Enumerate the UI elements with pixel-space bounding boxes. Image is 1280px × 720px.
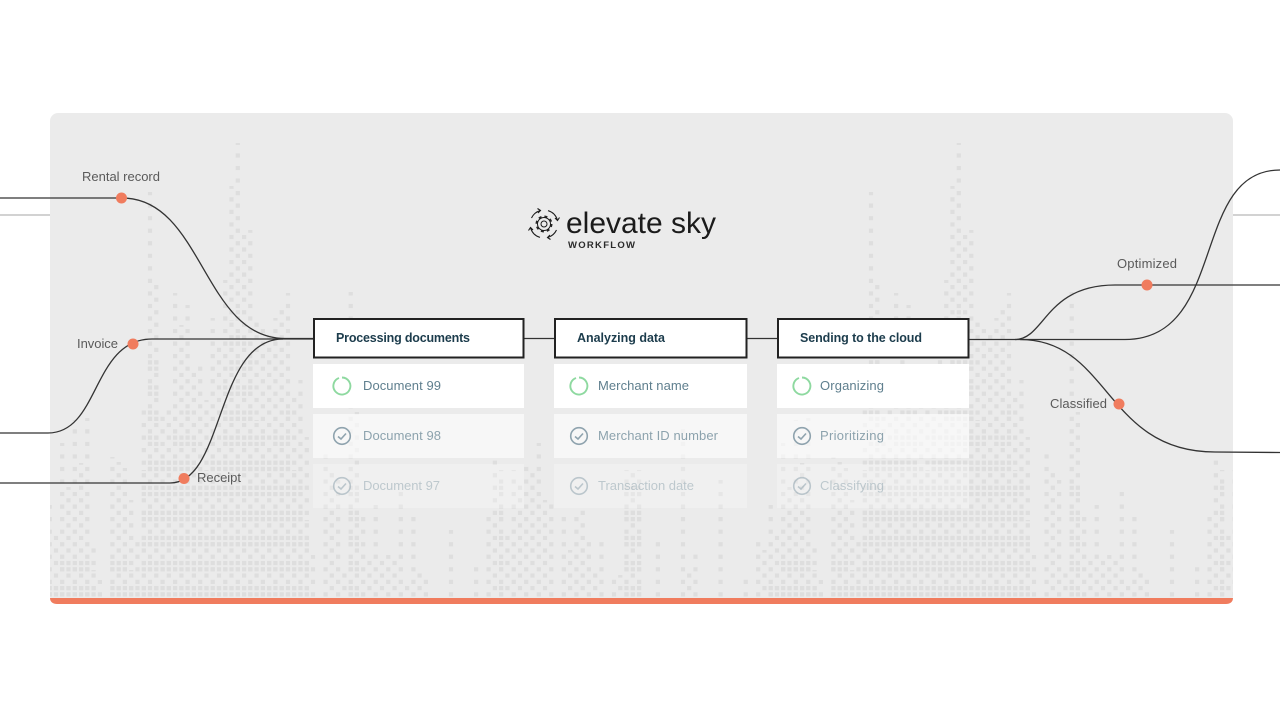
heading: analyzing data: Analyzing data: [577, 331, 666, 345]
icon: gear with circular arrows: [528, 208, 560, 240]
row: document 97: [313, 464, 524, 508]
logo wordmark: elevate sky: [566, 207, 716, 240]
dot matrix pattern: [50, 143, 1280, 596]
heading: analyzing data: [555, 319, 746, 358]
node: receipt: [178, 470, 241, 485]
row: merchant name: Merchant name: [598, 378, 689, 393]
row: merchant id number: [554, 414, 747, 458]
row: document 99: Document 99: [363, 378, 441, 393]
row: classifying: [777, 464, 969, 508]
node: invoice: Invoice: [77, 336, 118, 351]
row: transaction date: Transaction date: [598, 478, 694, 493]
heading: sending to the cloud: Sending to the cloud: [800, 331, 922, 345]
row: prioritizing: Prioritizing: [820, 428, 884, 443]
panel: sending to the cloud: [777, 319, 969, 508]
node: invoice: [77, 336, 138, 351]
row: document 97: Document 97: [363, 478, 440, 493]
logo subtitle: WORKFLOW: [568, 240, 635, 251]
node: optimized: [1117, 256, 1177, 290]
panel: analyzing data: [554, 319, 747, 508]
row: prioritizing: [777, 414, 969, 458]
node: classified: Classified: [1050, 396, 1107, 411]
row: classifying: Classifying: [820, 478, 884, 493]
row: document 99: [313, 364, 524, 408]
row: document 98: Document 98: [363, 428, 441, 443]
panel accent bar: [50, 598, 1233, 604]
horizontal rule behind panel: [0, 214, 1280, 216]
row: document 98: [313, 414, 524, 458]
row: merchant name: [554, 364, 747, 408]
node: rental record: Rental record: [82, 169, 160, 184]
row: merchant id number: Merchant ID number: [598, 428, 719, 443]
panel: workflow background: [50, 113, 1233, 604]
logo: elevate sky workflow: [528, 207, 716, 251]
row: organizing: Organizing: [820, 378, 884, 393]
row: organizing: [777, 364, 969, 408]
input and output flow lines: [0, 170, 1280, 483]
heading: processing documents: [314, 319, 524, 358]
node: receipt: Receipt: [197, 470, 241, 485]
heading: sending to the cloud: [778, 319, 968, 358]
node: optimized: Optimized: [1117, 256, 1177, 271]
panel: processing documents: [313, 319, 524, 508]
node: rental record: [82, 169, 160, 204]
row: transaction date: [554, 464, 747, 508]
heading: processing documents: Processing documents: [336, 331, 470, 345]
